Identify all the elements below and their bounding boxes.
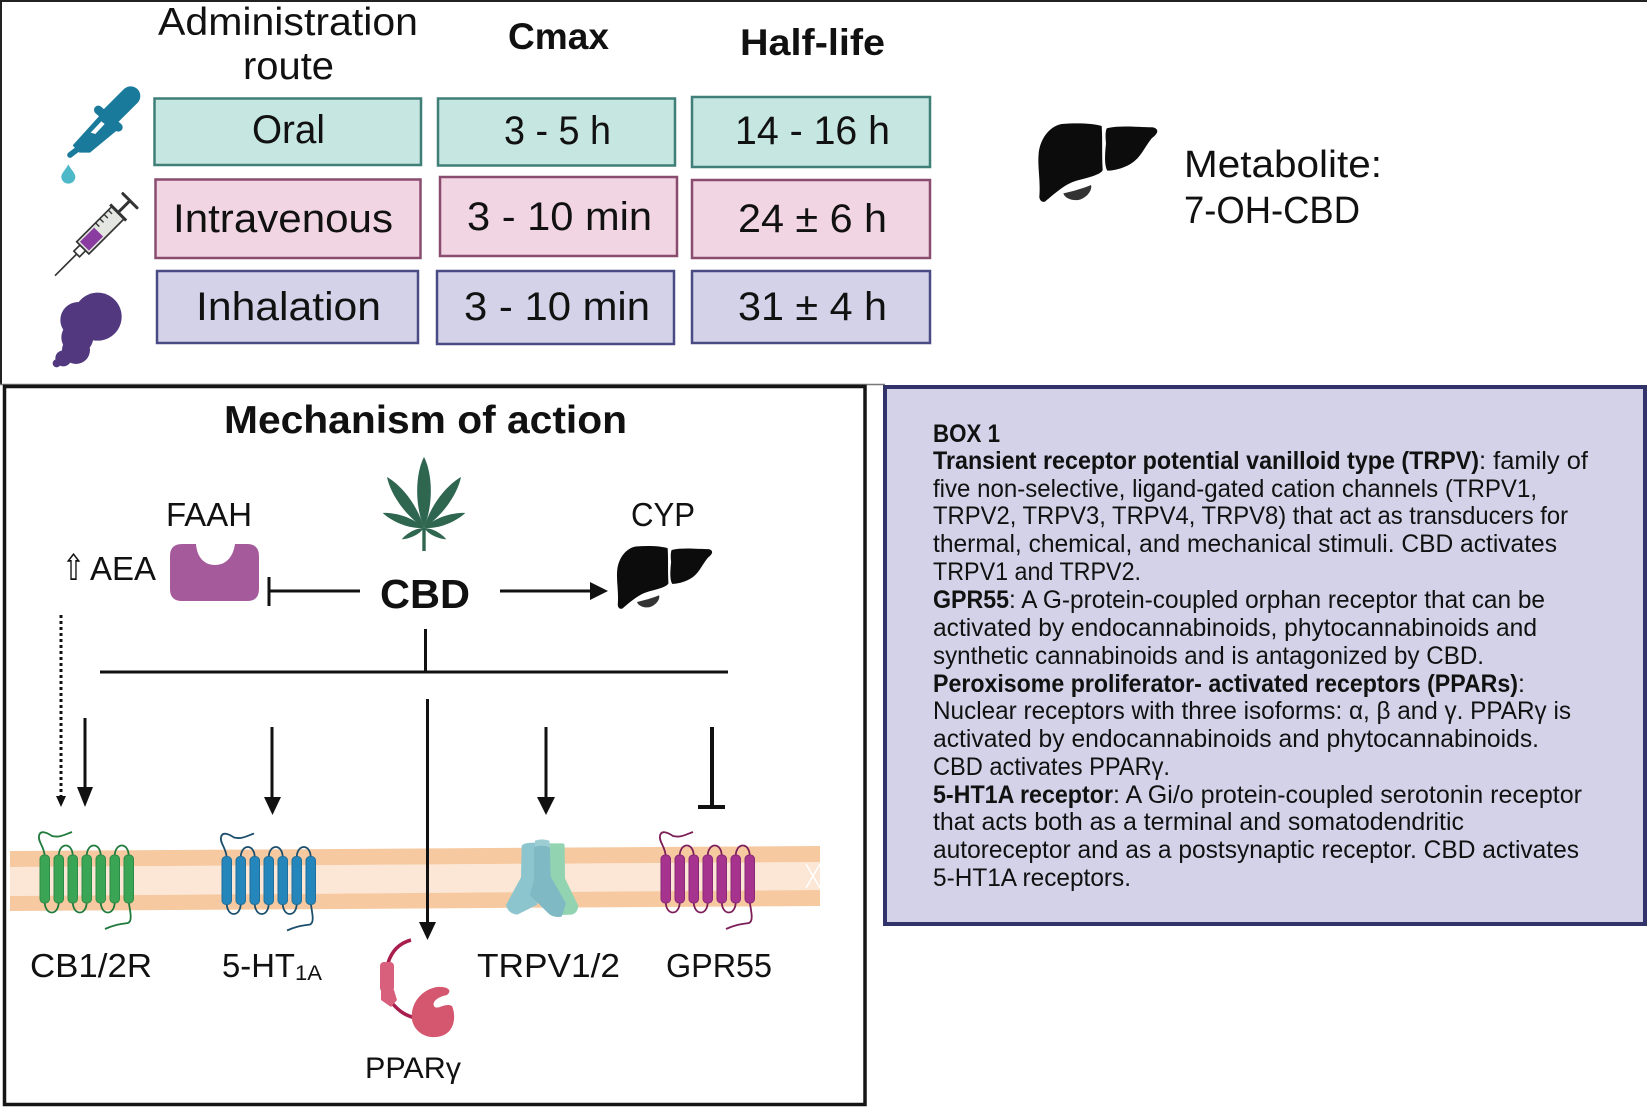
text: PPAR definition: : bbox=[1518, 670, 1525, 698]
cell: oral half-life: 14 - 16 h bbox=[735, 109, 890, 153]
label: CB1/2R: CB1/2R bbox=[30, 947, 152, 984]
cell: intravenous Cmax: 3 - 10 min bbox=[467, 195, 652, 239]
text: TRPV definition: Transient receptor potential vanilloid type (TRPV) bbox=[933, 447, 1479, 475]
text: 5-HT1A definition: that acts both as a terminal and somatodendritic bbox=[933, 808, 1464, 836]
connector: CBD branch line bbox=[100, 629, 728, 672]
arrow: dotted AEA to CB receptors bbox=[56, 615, 66, 807]
panel: metabolite bbox=[1038, 123, 1382, 232]
arrow: CBD to CYP bbox=[500, 582, 608, 600]
panel: pharmacokinetics table bbox=[47, 1, 930, 367]
icon: cannabis leaf bbox=[381, 457, 467, 551]
row: intravenous bbox=[156, 177, 930, 258]
heading: Cmax: Cmax bbox=[508, 16, 609, 57]
text: TRPV definition: : family of bbox=[1479, 447, 1588, 475]
cell: inhalation half-life bbox=[692, 271, 930, 343]
label: CBD: CBD bbox=[380, 571, 470, 617]
heading: administration route: route bbox=[243, 45, 334, 88]
arrow: CBD inhibits GPR55 bbox=[698, 727, 725, 807]
membrane bbox=[10, 846, 820, 911]
receptor: PPAR gamma bbox=[380, 940, 454, 1037]
cell: intravenous route: Intravenous bbox=[173, 197, 393, 241]
panel: box 1 bbox=[885, 387, 1645, 924]
arrow: CBD to CB1/2R bbox=[77, 718, 93, 807]
cell: oral Cmax: 3 - 5 h bbox=[504, 109, 611, 153]
text: box 1 heading: BOX 1 bbox=[933, 420, 1000, 448]
heading: administration route bbox=[158, 1, 418, 88]
label: CYP: CYP bbox=[631, 496, 695, 533]
label: 5-HT1A: 5-HT bbox=[222, 947, 295, 984]
receptor: 5-HT1A blue bbox=[221, 834, 316, 930]
panel: mechanism of action bbox=[4, 386, 865, 1104]
icon: liver CYP bbox=[617, 546, 712, 609]
label: increased AEA bbox=[62, 548, 156, 589]
text: PPAR definition: Peroxisome proliferator- activated receptors (PPARs) bbox=[933, 670, 1518, 698]
cell: intravenous half-life: 24 ± 6 h bbox=[738, 197, 887, 241]
text: GPR55 definition: synthetic cannabinoids and is antagonized by CBD. bbox=[933, 642, 1484, 670]
text: GPR55 definition: GPR55 bbox=[933, 586, 1009, 614]
text: metabolite label: 7-OH-CBD bbox=[1184, 190, 1360, 232]
text: TRPV definition: five non-selective, ligand-gated cation channels (TRPV1, bbox=[933, 475, 1537, 503]
text: 5-HT1A definition: autoreceptor and as a postsynaptic receptor. CBD activates bbox=[933, 836, 1579, 864]
icon: liver bbox=[1038, 123, 1157, 202]
text: metabolite label: Metabolite: bbox=[1184, 144, 1382, 186]
cell: intravenous Cmax bbox=[440, 177, 677, 256]
arrow: CBD inhibits FAAH bbox=[269, 577, 360, 606]
text: metabolite label bbox=[1184, 144, 1382, 232]
cell: oral half-life bbox=[692, 97, 930, 167]
cell: inhalation Cmax: 3 - 10 min bbox=[464, 285, 650, 329]
icon: smoke cloud bbox=[53, 293, 122, 367]
label: 5-HT1A: 1A bbox=[295, 962, 322, 985]
text: GPR55 definition: activated by endocannabinoids, phytocannabinoids and bbox=[933, 614, 1537, 642]
text: GPR55 definition bbox=[933, 586, 1545, 670]
icon: dropper bbox=[61, 96, 131, 184]
cell: intravenous route bbox=[156, 180, 420, 258]
label: PPAR gamma: PPARγ bbox=[365, 1052, 461, 1085]
text: PPAR definition bbox=[933, 670, 1571, 781]
text: TRPV definition: TRPV2, TRPV3, TRPV4, TRPV8) that act as transducers for bbox=[933, 502, 1568, 530]
icon: syringe bbox=[47, 193, 138, 284]
text: PPAR definition: Nuclear receptors with three isoforms: α, β and γ. PPARγ is bbox=[933, 697, 1571, 725]
cell: inhalation route: Inhalation bbox=[196, 285, 381, 329]
cell: oral route: Oral bbox=[252, 108, 325, 152]
receptor: CB1/2R green bbox=[39, 832, 133, 929]
text: 5-HT1A definition: : A Gi/o protein-coupled serotonin receptor bbox=[1113, 781, 1582, 809]
heading: administration route: Administration bbox=[158, 1, 418, 44]
arrow: CBD to TRPV1/2 bbox=[537, 727, 555, 815]
cell: inhalation Cmax bbox=[437, 271, 674, 344]
label: GPR55: GPR55 bbox=[666, 947, 772, 984]
text: 5-HT1A definition: 5-HT1A receptors. bbox=[933, 864, 1131, 892]
arrow: CBD to 5-HT1A bbox=[264, 727, 281, 815]
label: TRPV1/2: TRPV1/2 bbox=[477, 947, 620, 984]
cell: oral Cmax bbox=[438, 98, 675, 166]
heading: mechanism of action: Mechanism of action bbox=[224, 399, 627, 442]
text: TRPV definition bbox=[933, 447, 1588, 586]
label: increased AEA: ⇧ bbox=[62, 548, 85, 589]
arrow: CBD to PPAR gamma bbox=[419, 699, 436, 940]
cell: inhalation route bbox=[157, 271, 418, 343]
text: TRPV definition: thermal, chemical, and mechanical stimuli. CBD activates bbox=[933, 530, 1557, 558]
cell: intravenous half-life bbox=[692, 180, 930, 258]
heading: half-life: Half-life bbox=[740, 22, 885, 63]
receptor: TRPV1/2 channel bbox=[506, 839, 578, 917]
icon: FAAH enzyme bbox=[170, 544, 259, 601]
text: PPAR definition: CBD activates PPARγ. bbox=[933, 753, 1170, 781]
text: 5-HT1A definition: 5-HT1A receptor bbox=[933, 781, 1113, 809]
cell: inhalation half-life: 31 ± 4 h bbox=[738, 285, 887, 329]
text: TRPV definition: TRPV1 and TRPV2. bbox=[933, 558, 1141, 586]
cell: oral route bbox=[154, 98, 421, 165]
receptor: GPR55 purple bbox=[660, 832, 754, 929]
label: FAAH: FAAH bbox=[166, 496, 252, 533]
text: 5-HT1A definition bbox=[933, 781, 1582, 892]
label: increased AEA: AEA bbox=[90, 550, 156, 587]
text: GPR55 definition: : A G-protein-coupled orphan receptor that can be bbox=[1009, 586, 1545, 614]
row: oral bbox=[154, 97, 930, 167]
text: PPAR definition: activated by endocannabinoids and phytocannabinoids. bbox=[933, 725, 1539, 753]
row: inhalation bbox=[157, 271, 930, 344]
